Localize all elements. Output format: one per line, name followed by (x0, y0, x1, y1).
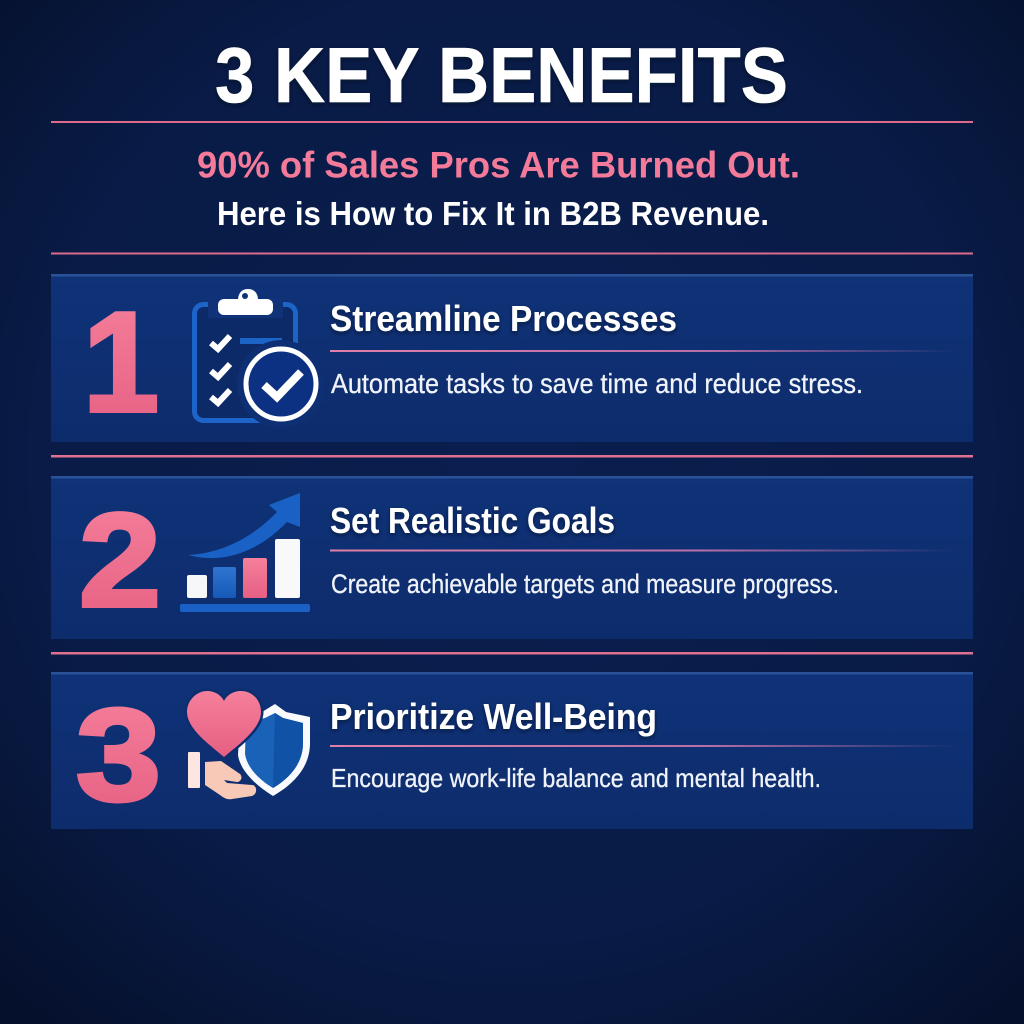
icon: heart, hand and shield (187, 691, 310, 799)
number 2: 2 (79, 487, 161, 635)
panel 2 heading: Set Realistic Goals (330, 500, 615, 541)
panel 3 heading: Prioritize Well-Being (330, 696, 657, 737)
subtitle: pink headline: 90% of Sales Pros Are Burned Out. (197, 144, 800, 186)
panel 2 description: Create achievable targets and measure progress. (331, 569, 839, 599)
panel 3 description: Encourage work-life balance and mental health. (331, 763, 821, 793)
subtitle: white line: Here is How to Fix It in B2B Revenue. (217, 195, 769, 232)
panel 1 heading: Streamline Processes (330, 298, 677, 339)
panel 1 description: Automate tasks to save time and reduce stress. (331, 368, 863, 399)
number 1: 1 (83, 283, 159, 442)
panel 2: set realistic goals (51, 476, 973, 639)
icon: rising bar chart with arrow (180, 493, 310, 612)
panel 3: prioritize well-being (51, 672, 973, 829)
panel 1: streamline processes (51, 274, 973, 442)
number 3: 3 (76, 681, 161, 828)
title: 3 KEY BENEFITS (215, 31, 788, 119)
icon: clipboard with checkmark (194, 289, 325, 428)
